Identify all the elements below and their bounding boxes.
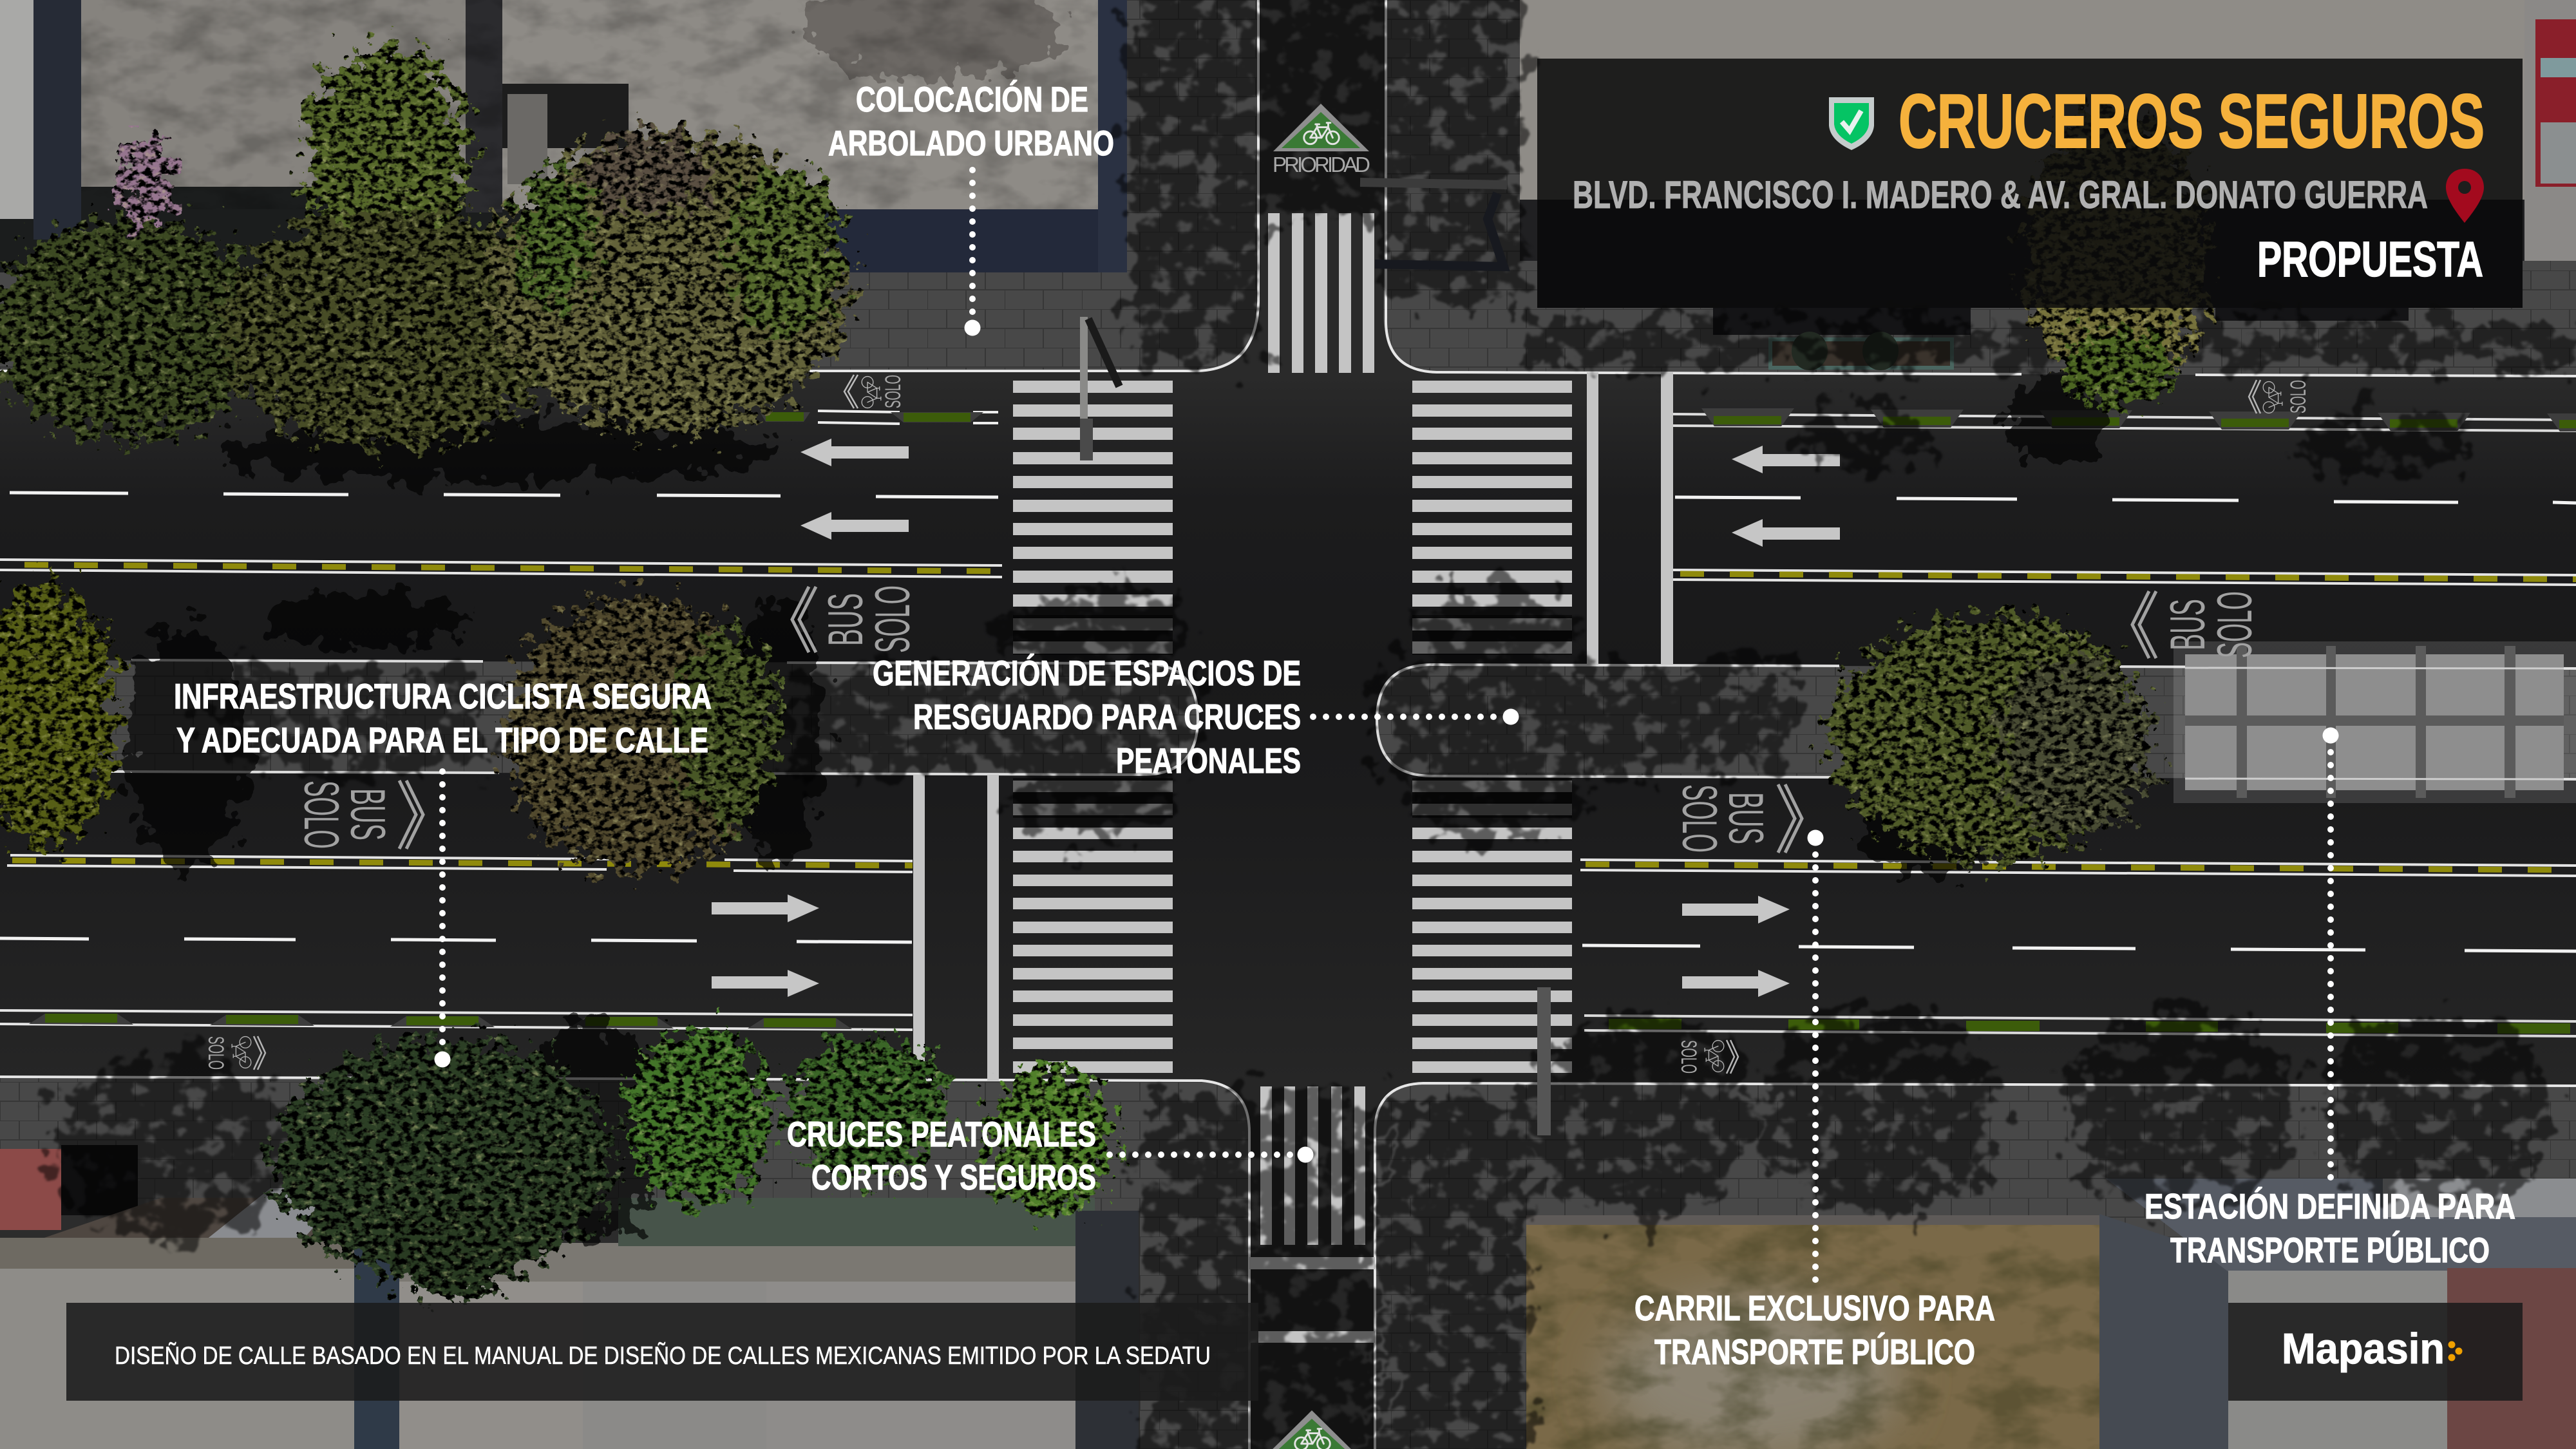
- footnote panel: [66, 1303, 1258, 1401]
- median curb lines: [109, 660, 2576, 779]
- bus lane mark north east: [2132, 591, 2262, 658]
- logo panel: Mapasin: [2282, 1325, 2445, 1373]
- tree median west: [506, 596, 779, 873]
- stop lines east upper: [1587, 372, 1673, 665]
- cycling priority sign north: PRIORIDAD: [1273, 153, 1370, 176]
- street intersection aerial infographic: SOLO: [2208, 591, 2262, 658]
- subtitle: PROPUESTA: [2257, 232, 2483, 287]
- bike lane mark north east: [2249, 380, 2311, 413]
- sidewalk north west: [0, 0, 1258, 371]
- bus lane mark south west: BUS: [340, 788, 395, 840]
- callout: espacios de resguardo: PEATONALES: [1116, 741, 1301, 781]
- callout: carril exclusivo: CARRIL EXCLUSIVO PARA: [1634, 1288, 1995, 1328]
- callout: estación transporte público: [2145, 728, 2515, 1270]
- planter: [1770, 332, 1952, 370]
- icon: location pin: [2446, 169, 2484, 223]
- bus lane mark north west: [792, 585, 920, 653]
- building roofs north west: [0, 0, 1127, 370]
- title panel: [1537, 59, 2523, 308]
- callout: arbolado urbano: COLOCACIÓN DE: [856, 79, 1088, 119]
- callout: infraestructura ciclista: INFRAESTRUCTURA CICLISTA SEGURA: [174, 676, 712, 716]
- callout: carril exclusivo: [1634, 829, 1995, 1372]
- tree with pink blossoms: [115, 137, 175, 227]
- dark tree south west: [274, 1037, 615, 1298]
- bus lane mark south west: [294, 781, 423, 849]
- bus lane mark south east: BUS: [1718, 792, 1773, 844]
- bike lane buffer south west: [0, 1010, 913, 1030]
- sidewalk south west: [0, 1077, 1249, 1449]
- bus lane mark north west: BUS: [819, 593, 873, 646]
- tree canopy north west: [0, 45, 850, 448]
- callout: espacios de resguardo: [873, 653, 1519, 781]
- crosswalk east lower: [1412, 781, 1572, 1073]
- bus lane mark south west: SOLO: [294, 781, 348, 849]
- shadow of trees on the road: [126, 374, 2103, 1243]
- buildings south west: [0, 1145, 1140, 1449]
- street intersection aerial infographic: SOLO: [866, 585, 920, 653]
- callout: cruces peatonales: CRUCES PEATONALES: [787, 1114, 1096, 1154]
- callout: estación transporte público: TRANSPORTE PÚBLICO: [2170, 1230, 2490, 1270]
- bike lane mark south east: [1676, 1040, 1738, 1074]
- traffic signal poles: [1080, 182, 1551, 1135]
- solid shadows on crossings: [1013, 615, 1572, 818]
- callout: arbolado urbano: ARBOLADO URBANO: [828, 123, 1114, 163]
- bike lane mark south west: [204, 1036, 265, 1070]
- stop bars south lane: [1249, 1257, 1375, 1343]
- south curb lines: [0, 1077, 2576, 1449]
- cycling priority sign north: [1273, 104, 1370, 176]
- crosswalk west upper: [1013, 381, 1173, 654]
- bus lane separators east: [1580, 570, 2576, 876]
- crosswalk south: [1260, 1086, 1365, 1245]
- median east: [1377, 665, 2576, 779]
- cycling priority sign south: [1264, 1410, 1360, 1449]
- station: public transport: [2174, 641, 2576, 803]
- bike lane buffer north east: [1673, 408, 2576, 431]
- building roofs north east: [1520, 0, 2576, 264]
- bike lane mark south east: SOLO: [1676, 1040, 1701, 1074]
- callout: cruces peatonales: [787, 1114, 1314, 1197]
- stop lines west lower: [913, 775, 999, 1081]
- footnote panel: DISEÑO DE CALLE BASADO EN EL MANUAL DE DISEÑO DE CALLES MEXICANAS EMITIDO POR LA SEDATU: [115, 1342, 1211, 1370]
- bike lane mark north west: SOLO: [881, 375, 905, 408]
- callout: espacios de resguardo: GENERACIÓN DE ESPACIOS DE: [873, 653, 1301, 693]
- dark structure under the title panel: [1537, 200, 2523, 335]
- callout: espacios de resguardo: RESGUARDO PARA CRUCES: [913, 697, 1301, 737]
- bus lane mark north east: BUS: [2161, 599, 2215, 650]
- callout: arbolado urbano: [828, 79, 1114, 336]
- callout: infraestructura ciclista: Y ADECUADA PARA EL TIPO DE CALLE: [176, 720, 708, 760]
- crosswalk east upper: [1412, 381, 1572, 654]
- sidewalk north east: [1383, 0, 2576, 376]
- lane dashes: [0, 493, 2576, 951]
- bike lane mark north east: SOLO: [2286, 380, 2311, 413]
- north lane edges: [0, 0, 2576, 376]
- callout: cruces peatonales: CORTOS Y SEGUROS: [811, 1157, 1096, 1197]
- bus lane mark south east: [1672, 784, 1802, 853]
- buildings and lot south east: [1526, 1179, 2576, 1449]
- crosswalk west lower: [1013, 781, 1173, 1073]
- bike lane mark north west: [844, 375, 905, 408]
- tree median far west: [0, 583, 116, 847]
- tree median east: [1829, 615, 2151, 860]
- bus lane mark south east: SOLO: [1672, 784, 1727, 853]
- logo panel: [2228, 1303, 2523, 1401]
- icon: green shield: [1829, 97, 1874, 150]
- crosswalk north: [1268, 213, 1374, 373]
- bike lane mark south west: SOLO: [204, 1036, 228, 1070]
- bike lane buffer north west: [760, 411, 998, 424]
- callout: carril exclusivo: TRANSPORTE PÚBLICO: [1654, 1332, 1975, 1372]
- sidewalk south east: [1375, 1083, 2576, 1449]
- tree north east: [2025, 106, 2206, 406]
- green trees south: [628, 1027, 1114, 1214]
- bike lane buffer south east: [1584, 1016, 2576, 1036]
- bus lane separators west: [0, 560, 1002, 872]
- median west: [0, 660, 1198, 775]
- traffic arrows: [712, 439, 1840, 997]
- callout: infraestructura ciclista: [174, 676, 712, 1068]
